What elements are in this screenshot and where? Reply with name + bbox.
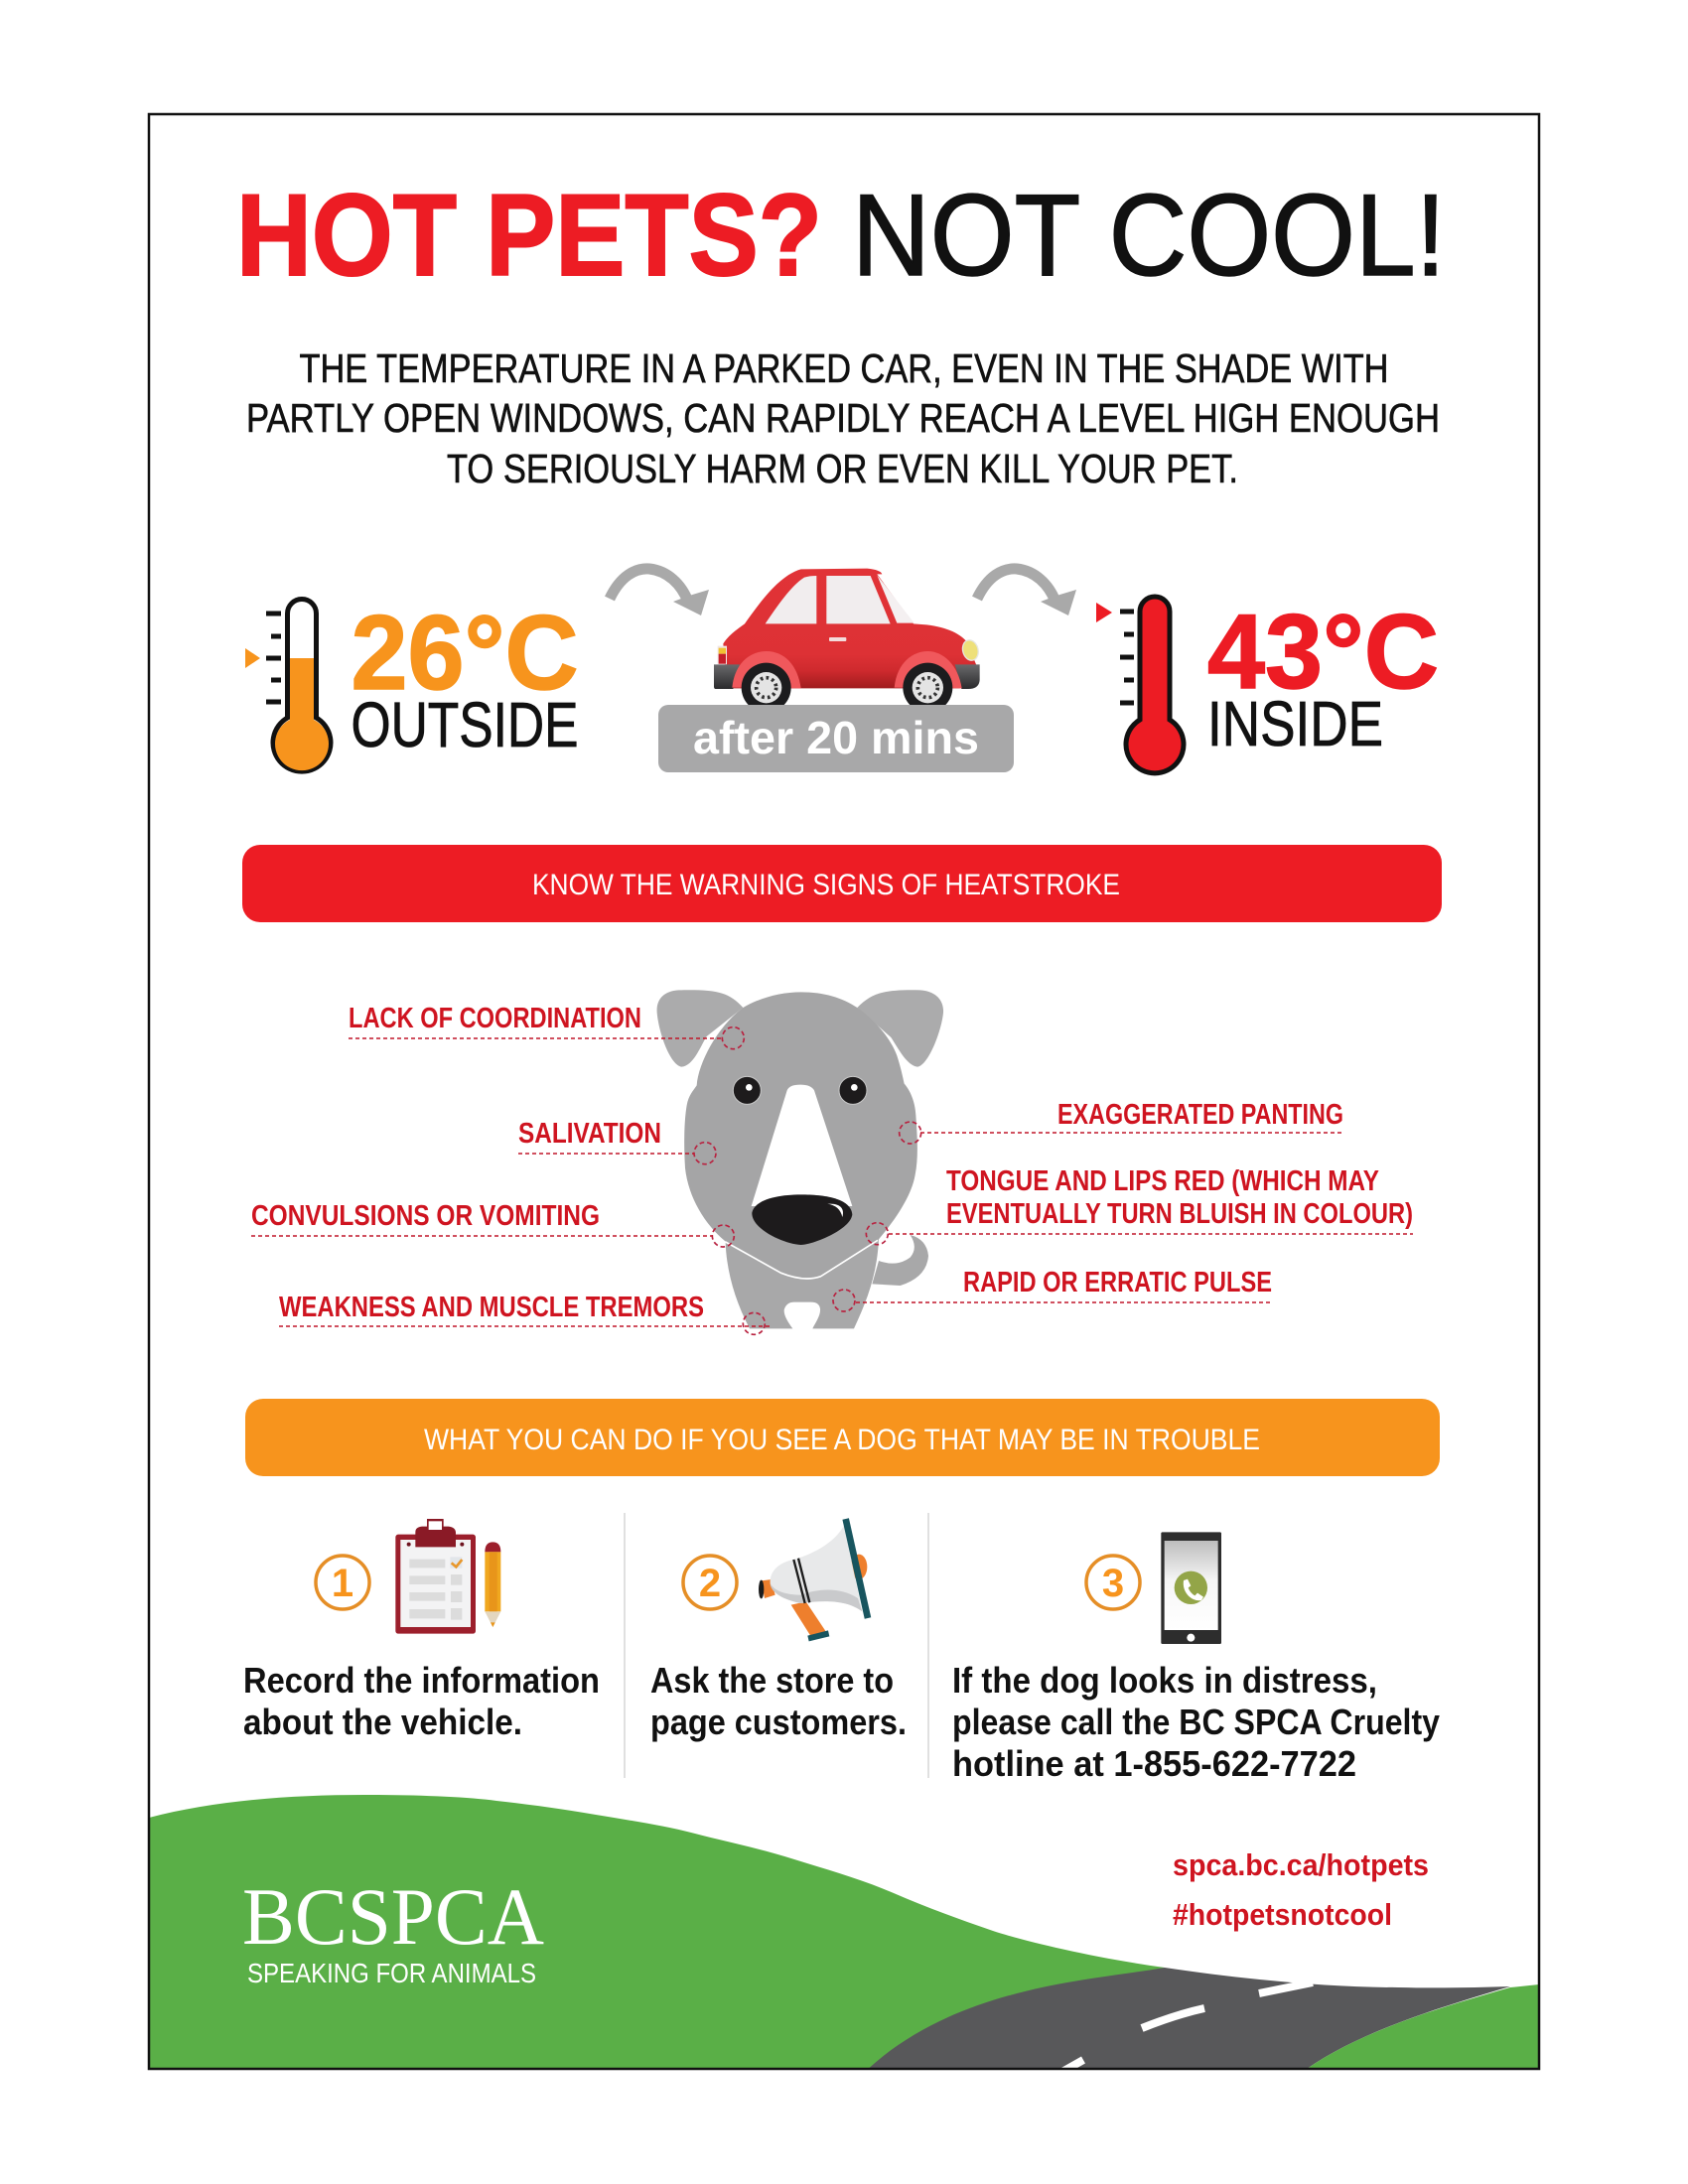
step 1 number	[316, 1556, 369, 1609]
step 3 number: 3	[1102, 1562, 1124, 1605]
dog body	[726, 1239, 879, 1328]
inside temperature: 43°C	[1207, 592, 1439, 711]
dog nose	[752, 1194, 852, 1245]
banner: what you can do: WHAT YOU CAN DO IF YOU SEE A DOG THAT MAY BE IN TROUBLE	[424, 1424, 1260, 1456]
footer landscape: hill and road	[149, 1795, 1539, 2075]
web links: spca.bc.ca/hotpets	[1173, 1847, 1429, 1882]
step 3 text: hotline at 1-855-622-7722	[952, 1743, 1356, 1784]
web links	[1173, 1847, 1429, 1932]
outside temperature: 26°C	[352, 593, 578, 712]
banner: warning signs	[242, 845, 1442, 922]
step 3 text: If the dog looks in distress,	[952, 1660, 1377, 1701]
web links: #hotpetsnotcool	[1173, 1897, 1392, 1932]
step 2 number: 2	[699, 1562, 721, 1605]
dog head	[684, 992, 917, 1279]
title: NOT COOL!	[852, 170, 1446, 300]
label: tongue and lips: TONGUE AND LIPS RED (WHICH MAY	[946, 1165, 1379, 1197]
label: exaggerated panting: EXAGGERATED PANTING	[1057, 1099, 1343, 1131]
intro text: THE TEMPERATURE IN A PARKED CAR, EVEN IN THE SHADE WITH	[300, 345, 1388, 391]
step 1 text: about the vehicle.	[243, 1702, 522, 1742]
step 2 number	[683, 1556, 737, 1609]
step 1 number: 1	[332, 1562, 353, 1605]
dog ears	[657, 990, 943, 1067]
dog muzzle	[752, 1085, 852, 1206]
label: salivation: SALIVATION	[518, 1118, 661, 1150]
label: weakness and muscle tremors: WEAKNESS AND MUSCLE TREMORS	[279, 1292, 704, 1323]
banner: warning signs: KNOW THE WARNING SIGNS OF HEATSTROKE	[532, 869, 1120, 901]
inside temperature	[1207, 592, 1439, 759]
icon: phone	[1161, 1532, 1221, 1644]
icon: clipboard and pencil	[395, 1519, 500, 1634]
arrow: right curved	[977, 569, 1076, 615]
step 3 text: please call the BC SPCA Cruelty	[952, 1702, 1440, 1742]
step 1 text: Record the information	[243, 1660, 600, 1701]
step 1 text	[243, 1660, 600, 1742]
label: tongue and lips: EVENTUALLY TURN BLUISH IN COLOUR)	[946, 1198, 1413, 1230]
dog eyes	[733, 1076, 761, 1104]
inside temperature: INSIDE	[1207, 688, 1383, 759]
step 2 text	[650, 1660, 907, 1742]
banner: what you can do	[245, 1399, 1440, 1476]
after 20 mins label	[658, 705, 1014, 772]
title	[236, 170, 1446, 300]
step 3 number	[1086, 1556, 1140, 1609]
icon: inside thermometer	[1096, 597, 1184, 773]
intro text: TO SERIOUSLY HARM OR EVEN KILL YOUR PET.	[447, 446, 1238, 491]
arrow: left curved	[610, 569, 709, 615]
illustration: grey dog	[657, 990, 943, 1334]
label: rapid or erratic pulse: RAPID OR ERRATIC PULSE	[963, 1267, 1272, 1298]
logo: BCSPCA: BCSPCA	[242, 1871, 544, 1962]
step 2 text: Ask the store to	[650, 1660, 894, 1701]
icon: outside thermometer	[245, 600, 331, 771]
outside temperature	[352, 593, 578, 760]
after 20 mins label: after 20 mins	[693, 712, 979, 763]
icon: red car	[714, 569, 980, 713]
dog tail	[872, 1235, 928, 1286]
step 2 text: page customers.	[650, 1702, 907, 1742]
page frame	[149, 114, 1539, 2069]
label: lack of coordination: LACK OF COORDINATION	[349, 1003, 641, 1034]
logo: BCSPCA: SPEAKING FOR ANIMALS	[247, 1958, 536, 1988]
icon: megaphone	[759, 1519, 868, 1641]
label: tongue and lips	[889, 1165, 1413, 1234]
outside temperature: OUTSIDE	[352, 689, 578, 760]
intro text: PARTLY OPEN WINDOWS, CAN RAPIDLY REACH A LEVEL HIGH ENOUGH	[246, 395, 1440, 441]
label: convulsions or vomiting: CONVULSIONS OR VOMITING	[251, 1200, 600, 1232]
symptom markers	[722, 1027, 744, 1049]
intro text	[246, 345, 1440, 491]
title: HOT PETS?	[236, 170, 822, 300]
step 3 text	[952, 1660, 1440, 1784]
